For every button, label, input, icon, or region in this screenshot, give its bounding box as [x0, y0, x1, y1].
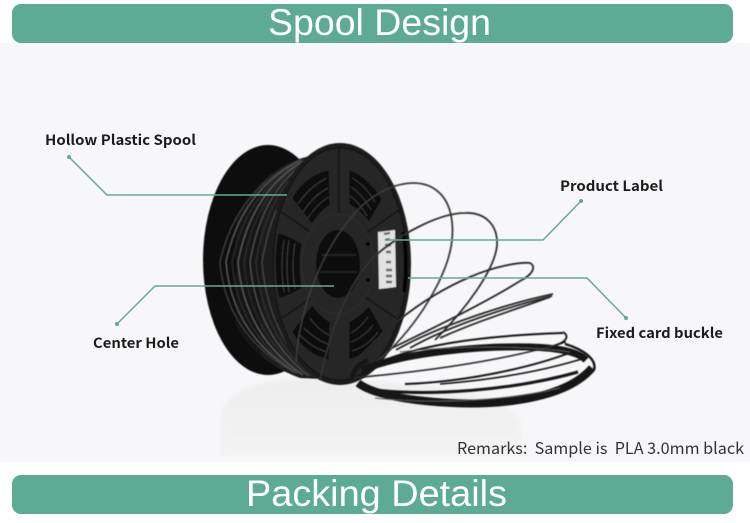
callout: Hollow Plastic Spool	[45, 130, 287, 195]
fixed card buckle	[403, 232, 406, 292]
spool photo	[203, 143, 411, 385]
remarks text: Remarks: Sample is PLA 3.0mm black	[457, 435, 744, 459]
spool rear flange	[203, 145, 333, 375]
callout: Center Hole	[93, 286, 334, 353]
spool front disc	[269, 143, 411, 385]
filament coil pile	[352, 332, 594, 403]
title bar: Spool Design	[12, 2, 733, 43]
callout: Center Hole: Center Hole	[93, 333, 179, 353]
callout: Fixed card buckle	[408, 278, 723, 343]
product label sticker	[378, 230, 396, 289]
loose filament loops	[296, 183, 553, 380]
mounting dots	[366, 242, 370, 246]
spool hub ring	[302, 214, 374, 314]
spool window filament lines	[282, 178, 378, 352]
callout: Product Label: Product Label	[560, 176, 664, 196]
reflection under spool	[231, 380, 474, 407]
spool spokes	[276, 148, 402, 322]
callout: Product Label	[388, 176, 664, 240]
center hole	[316, 230, 360, 298]
callout: Fixed card buckle: Fixed card buckle	[596, 323, 723, 343]
wound filament drum	[218, 156, 345, 380]
title bar: Packing Details: Packing Details	[246, 473, 507, 514]
callout: Hollow Plastic Spool: Hollow Plastic Spool	[45, 130, 197, 150]
title bar: Spool Design: Spool Design	[268, 2, 491, 43]
spool windows	[275, 170, 383, 360]
title bar: Packing Details	[12, 473, 733, 514]
